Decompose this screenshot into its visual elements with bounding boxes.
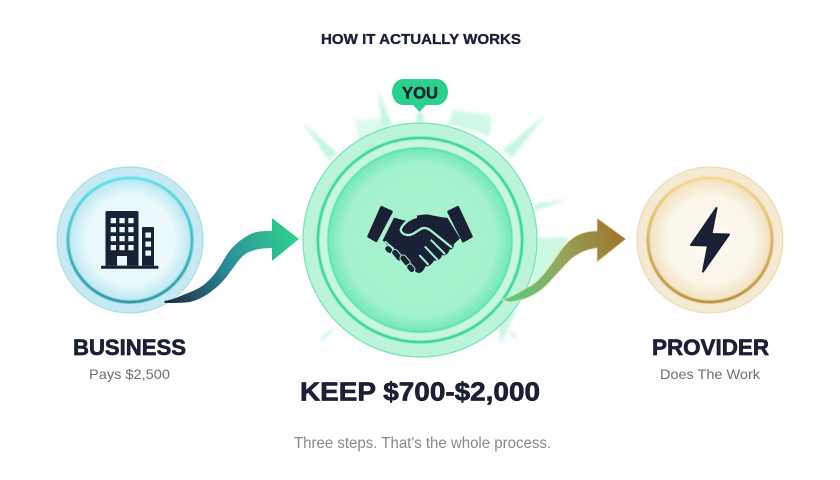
footer caption: Three steps. That's the whole process. bbox=[294, 435, 551, 452]
label: business: BUSINESS bbox=[73, 335, 186, 360]
arrow: you to provider bbox=[502, 218, 626, 302]
label: business: Pays $2,500 bbox=[89, 366, 170, 382]
icon: lightning bolt bbox=[691, 208, 729, 272]
center glow rays bbox=[302, 90, 569, 345]
label: business bbox=[73, 335, 186, 382]
panel: business circle bbox=[57, 167, 203, 313]
label: provider: Does The Work bbox=[660, 366, 761, 382]
label: provider bbox=[652, 335, 769, 382]
panel: you circle bbox=[303, 123, 537, 357]
label: keep amount: KEEP $700-$2,000 bbox=[300, 376, 540, 406]
icon: office building bbox=[101, 211, 158, 269]
panel: provider circle bbox=[637, 167, 783, 313]
title: HOW IT ACTUALLY WORKS bbox=[321, 32, 521, 48]
callout: you badge: YOU bbox=[402, 84, 438, 102]
arrow: business to you bbox=[164, 218, 299, 303]
label: provider: PROVIDER bbox=[652, 335, 769, 360]
icon: handshake bbox=[367, 206, 473, 274]
callout: you badge bbox=[392, 79, 448, 112]
